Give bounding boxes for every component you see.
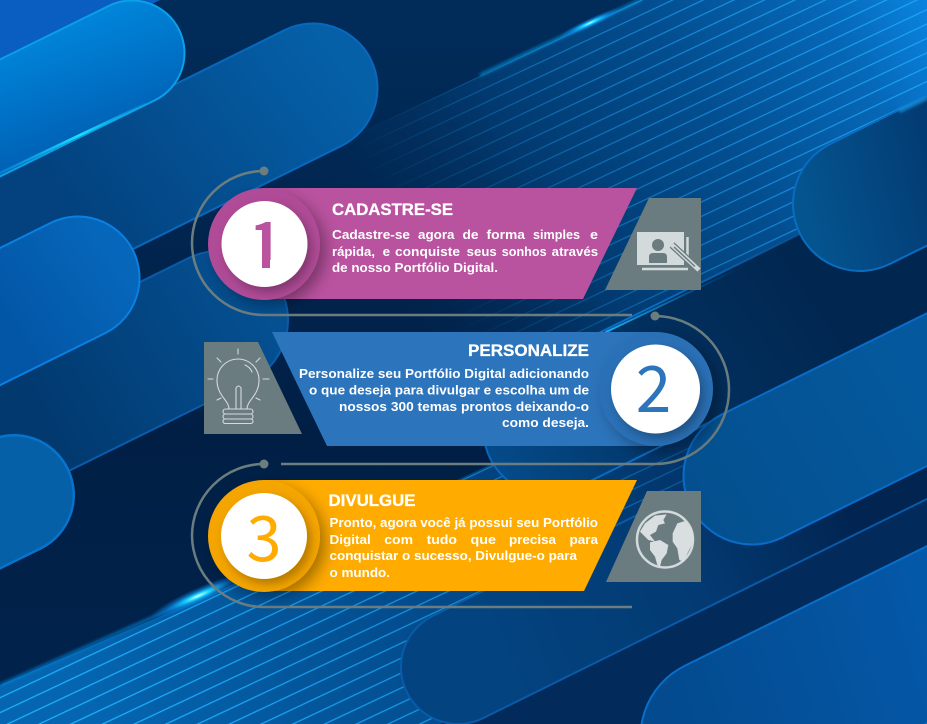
connector line 2 bbox=[281, 312, 729, 464]
heading: PERSONALIZE bbox=[468, 341, 589, 360]
connector line 1 bbox=[192, 166, 632, 315]
panel: step 1 cadastre-se bbox=[208, 188, 637, 300]
body text: o que deseja para divulgar e escolha um de bbox=[309, 382, 589, 398]
body text bbox=[332, 227, 598, 275]
body text: seus bbox=[467, 244, 497, 259]
body text: e bbox=[383, 244, 390, 259]
number badge 1: 1 bbox=[249, 196, 283, 286]
number badge 1 bbox=[208, 188, 320, 300]
icon panel: light bulb bbox=[204, 342, 302, 434]
body text: conquistar o sucesso, Divulgue-o para bbox=[330, 548, 578, 563]
body text: para bbox=[570, 532, 599, 547]
number badge 2 bbox=[599, 332, 713, 446]
body text: conquiste bbox=[395, 244, 460, 259]
body text: nossos 300 temas prontos deixando-o bbox=[339, 399, 589, 414]
body text bbox=[299, 366, 589, 430]
icon panel: portfolio bbox=[605, 198, 701, 290]
body text: sonhos bbox=[502, 244, 547, 259]
glow: bottom flare bbox=[0, 568, 249, 685]
body text: agora bbox=[418, 227, 455, 242]
body text: de nosso Portfólio Digital. bbox=[332, 260, 498, 275]
connector line 3 bbox=[192, 460, 632, 607]
body text: Personalize seu Portfólio Digital adicionando bbox=[299, 366, 589, 381]
panel: step 2 personalize bbox=[272, 332, 713, 446]
body text: Cadastre-se bbox=[332, 227, 410, 242]
body text: e bbox=[590, 227, 598, 242]
body text: através bbox=[552, 244, 598, 259]
icon panel: globe bbox=[606, 491, 701, 582]
body text: o mundo. bbox=[330, 565, 390, 580]
body text: forma bbox=[486, 227, 526, 242]
body text: tudo bbox=[427, 532, 457, 547]
body text: precisa bbox=[509, 532, 557, 547]
body text: rápida, bbox=[332, 244, 375, 259]
body text: Digital bbox=[330, 532, 371, 547]
body text bbox=[330, 515, 599, 580]
heading: DIVULGUE bbox=[328, 491, 416, 510]
panel: step 3 divulgue bbox=[208, 480, 637, 592]
glow: top streak bbox=[480, 0, 640, 75]
body text: que bbox=[470, 532, 496, 547]
number badge 3 bbox=[208, 480, 320, 592]
body text: como deseja. bbox=[502, 415, 589, 430]
number badge 3: 3 bbox=[247, 489, 281, 580]
heading: CADASTRE-SE bbox=[332, 200, 453, 219]
body text: Pronto, agora você já possui seu Portfólio bbox=[330, 515, 598, 530]
body text: de bbox=[462, 227, 478, 242]
number badge 2: 2 bbox=[636, 339, 671, 431]
body text: simples bbox=[533, 227, 580, 242]
body text: com bbox=[384, 532, 413, 547]
